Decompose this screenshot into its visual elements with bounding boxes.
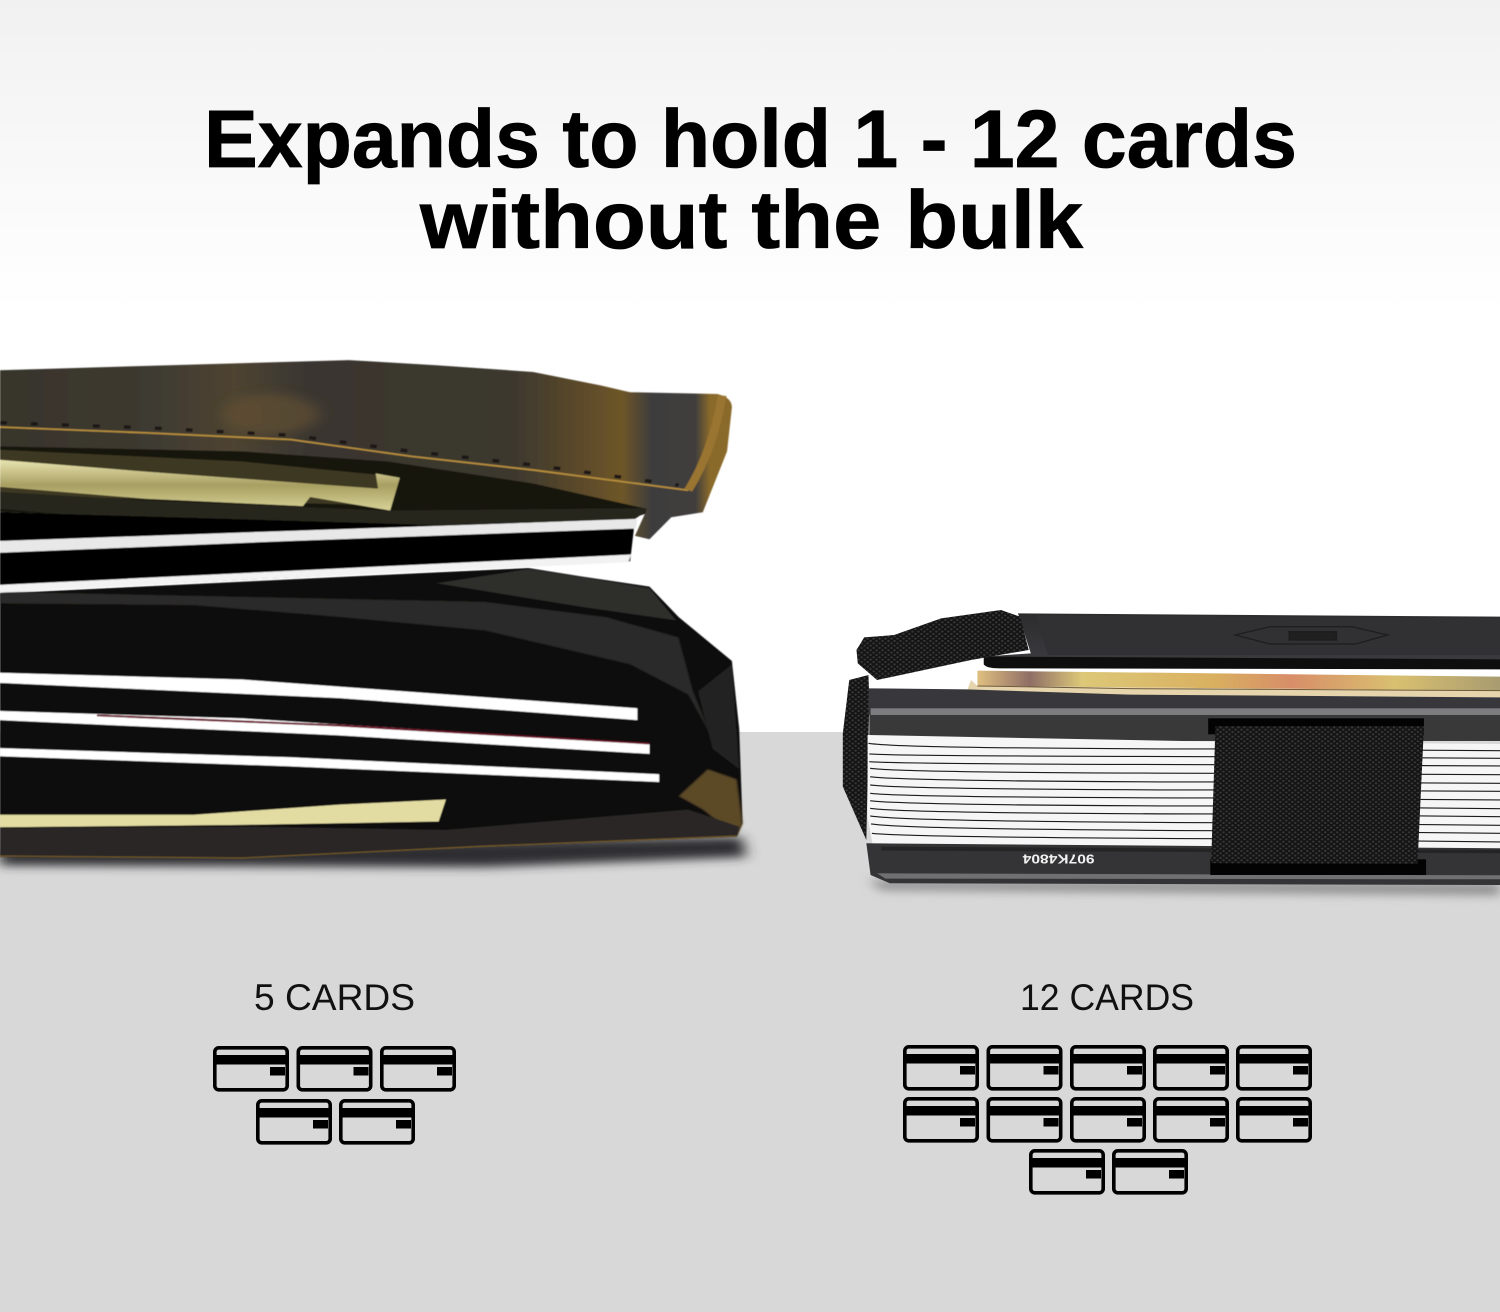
label: 12 cards: 12 CARDS xyxy=(1020,977,1194,1018)
upper cards xyxy=(0,512,637,593)
wallet shadow xyxy=(0,837,746,867)
lower wallet body xyxy=(0,568,743,859)
metal plate top xyxy=(868,688,1500,715)
title: Expands to hold 1 - 12 cards xyxy=(204,94,1297,185)
photo: slim metal wallet xyxy=(843,610,1500,895)
icons: 5 cards xyxy=(214,1048,455,1143)
slim wallet shadow xyxy=(868,880,1500,895)
upper banknotes xyxy=(0,460,400,511)
serial number: 907K4804 xyxy=(1022,851,1094,866)
metal plate bottom xyxy=(866,843,1500,885)
lower wallet leather fold xyxy=(0,592,713,739)
flap highlights xyxy=(223,394,320,434)
card stack xyxy=(868,735,1500,849)
upper pocket interior xyxy=(0,434,649,526)
lower wallet bottom flap xyxy=(0,810,739,859)
icons: 12 cards xyxy=(904,1047,1311,1193)
title: without the bulk xyxy=(419,175,1083,266)
inner wallet cards xyxy=(0,673,659,782)
title xyxy=(204,94,1297,266)
worn leather corner xyxy=(679,769,743,837)
logo badge xyxy=(1235,627,1388,644)
label: 5 cards: 5 CARDS xyxy=(254,977,415,1018)
elastic band side xyxy=(843,675,869,840)
banknote xyxy=(977,671,1500,691)
top plate xyxy=(984,613,1500,665)
photo: bulky leather wallet xyxy=(0,360,746,867)
lower banknotes xyxy=(0,800,446,827)
gold stitching xyxy=(0,427,688,490)
elastic strap xyxy=(856,610,1029,680)
stitch holes xyxy=(0,423,679,485)
leather flap xyxy=(0,360,732,539)
upper pocket lip xyxy=(0,492,649,529)
woven elastic patch xyxy=(1211,726,1424,864)
black strap slots xyxy=(1208,718,1426,875)
